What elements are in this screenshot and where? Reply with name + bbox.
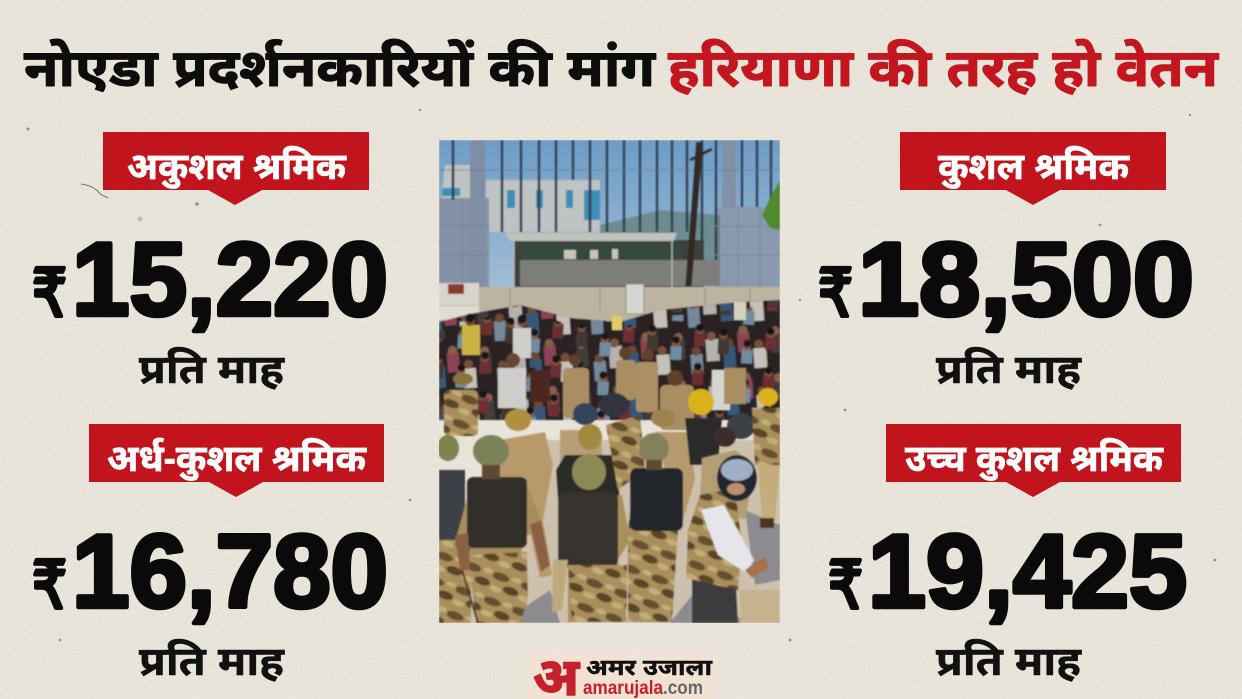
middle police officers	[437, 388, 780, 623]
ground	[439, 440, 780, 623]
banner: highly skilled worker	[886, 424, 1181, 497]
photo: protesters and police in front of glass building	[437, 140, 780, 623]
amount: 18,500: ₹	[818, 256, 853, 330]
utility pole	[684, 141, 703, 287]
officer: helmet and white sleeve	[686, 455, 769, 623]
banner: skilled worker: कुशल श्रमिक	[938, 146, 1130, 189]
logo url: amarujala.com	[583, 678, 703, 699]
glass building	[439, 140, 780, 300]
soldier: left, back to camera	[455, 435, 550, 623]
amount: 16,780: ₹	[32, 548, 67, 622]
per month label: प्रति माह	[139, 347, 285, 392]
banner: semi-skilled worker: अर्ध-कुशल श्रमिक	[107, 437, 367, 481]
banner: unskilled worker: अकुशल श्रमिक	[127, 146, 347, 189]
banner: highly skilled worker: उच्च कुशल श्रमिक	[905, 438, 1164, 481]
banner: unskilled worker	[103, 132, 369, 205]
title: black part: नोएडा प्रदर्शनकारियों की मांग	[24, 39, 656, 98]
amount: 19,425: ₹	[828, 548, 863, 622]
per month label: प्रति माह	[936, 347, 1082, 392]
per month label: प्रति माह	[139, 639, 285, 684]
logo name: अमर उजाला	[586, 655, 713, 680]
title: red part: हरियाणा की तरह हो वेतन	[668, 39, 1219, 98]
amount: 16,780: 16,780	[72, 514, 388, 630]
soldier: right of centre, back to camera	[628, 433, 683, 622]
crowd	[439, 300, 780, 420]
amount: 15,220: 15,220	[72, 222, 388, 338]
entrance canopy	[505, 233, 720, 288]
title	[24, 39, 1219, 98]
amount: 18,500: 18,500	[858, 222, 1194, 338]
amount: 19,425: 19,425	[868, 514, 1187, 630]
banner: skilled worker	[900, 132, 1166, 205]
per month label: प्रति माह	[936, 639, 1082, 684]
boundary wall	[439, 283, 780, 322]
amount: 15,220: ₹	[32, 256, 67, 330]
banner: semi-skilled worker	[89, 424, 384, 497]
logo: Amar Ujala	[527, 649, 717, 699]
panel: semi-skilled worker wage	[32, 424, 388, 684]
police row behind crowd line	[444, 347, 746, 436]
panel: highly skilled worker wage	[828, 424, 1187, 684]
panel: skilled worker wage	[818, 132, 1194, 392]
panel: unskilled worker wage	[32, 132, 388, 392]
soldier: centre, back to camera	[552, 454, 630, 622]
tree leaves	[762, 180, 780, 230]
